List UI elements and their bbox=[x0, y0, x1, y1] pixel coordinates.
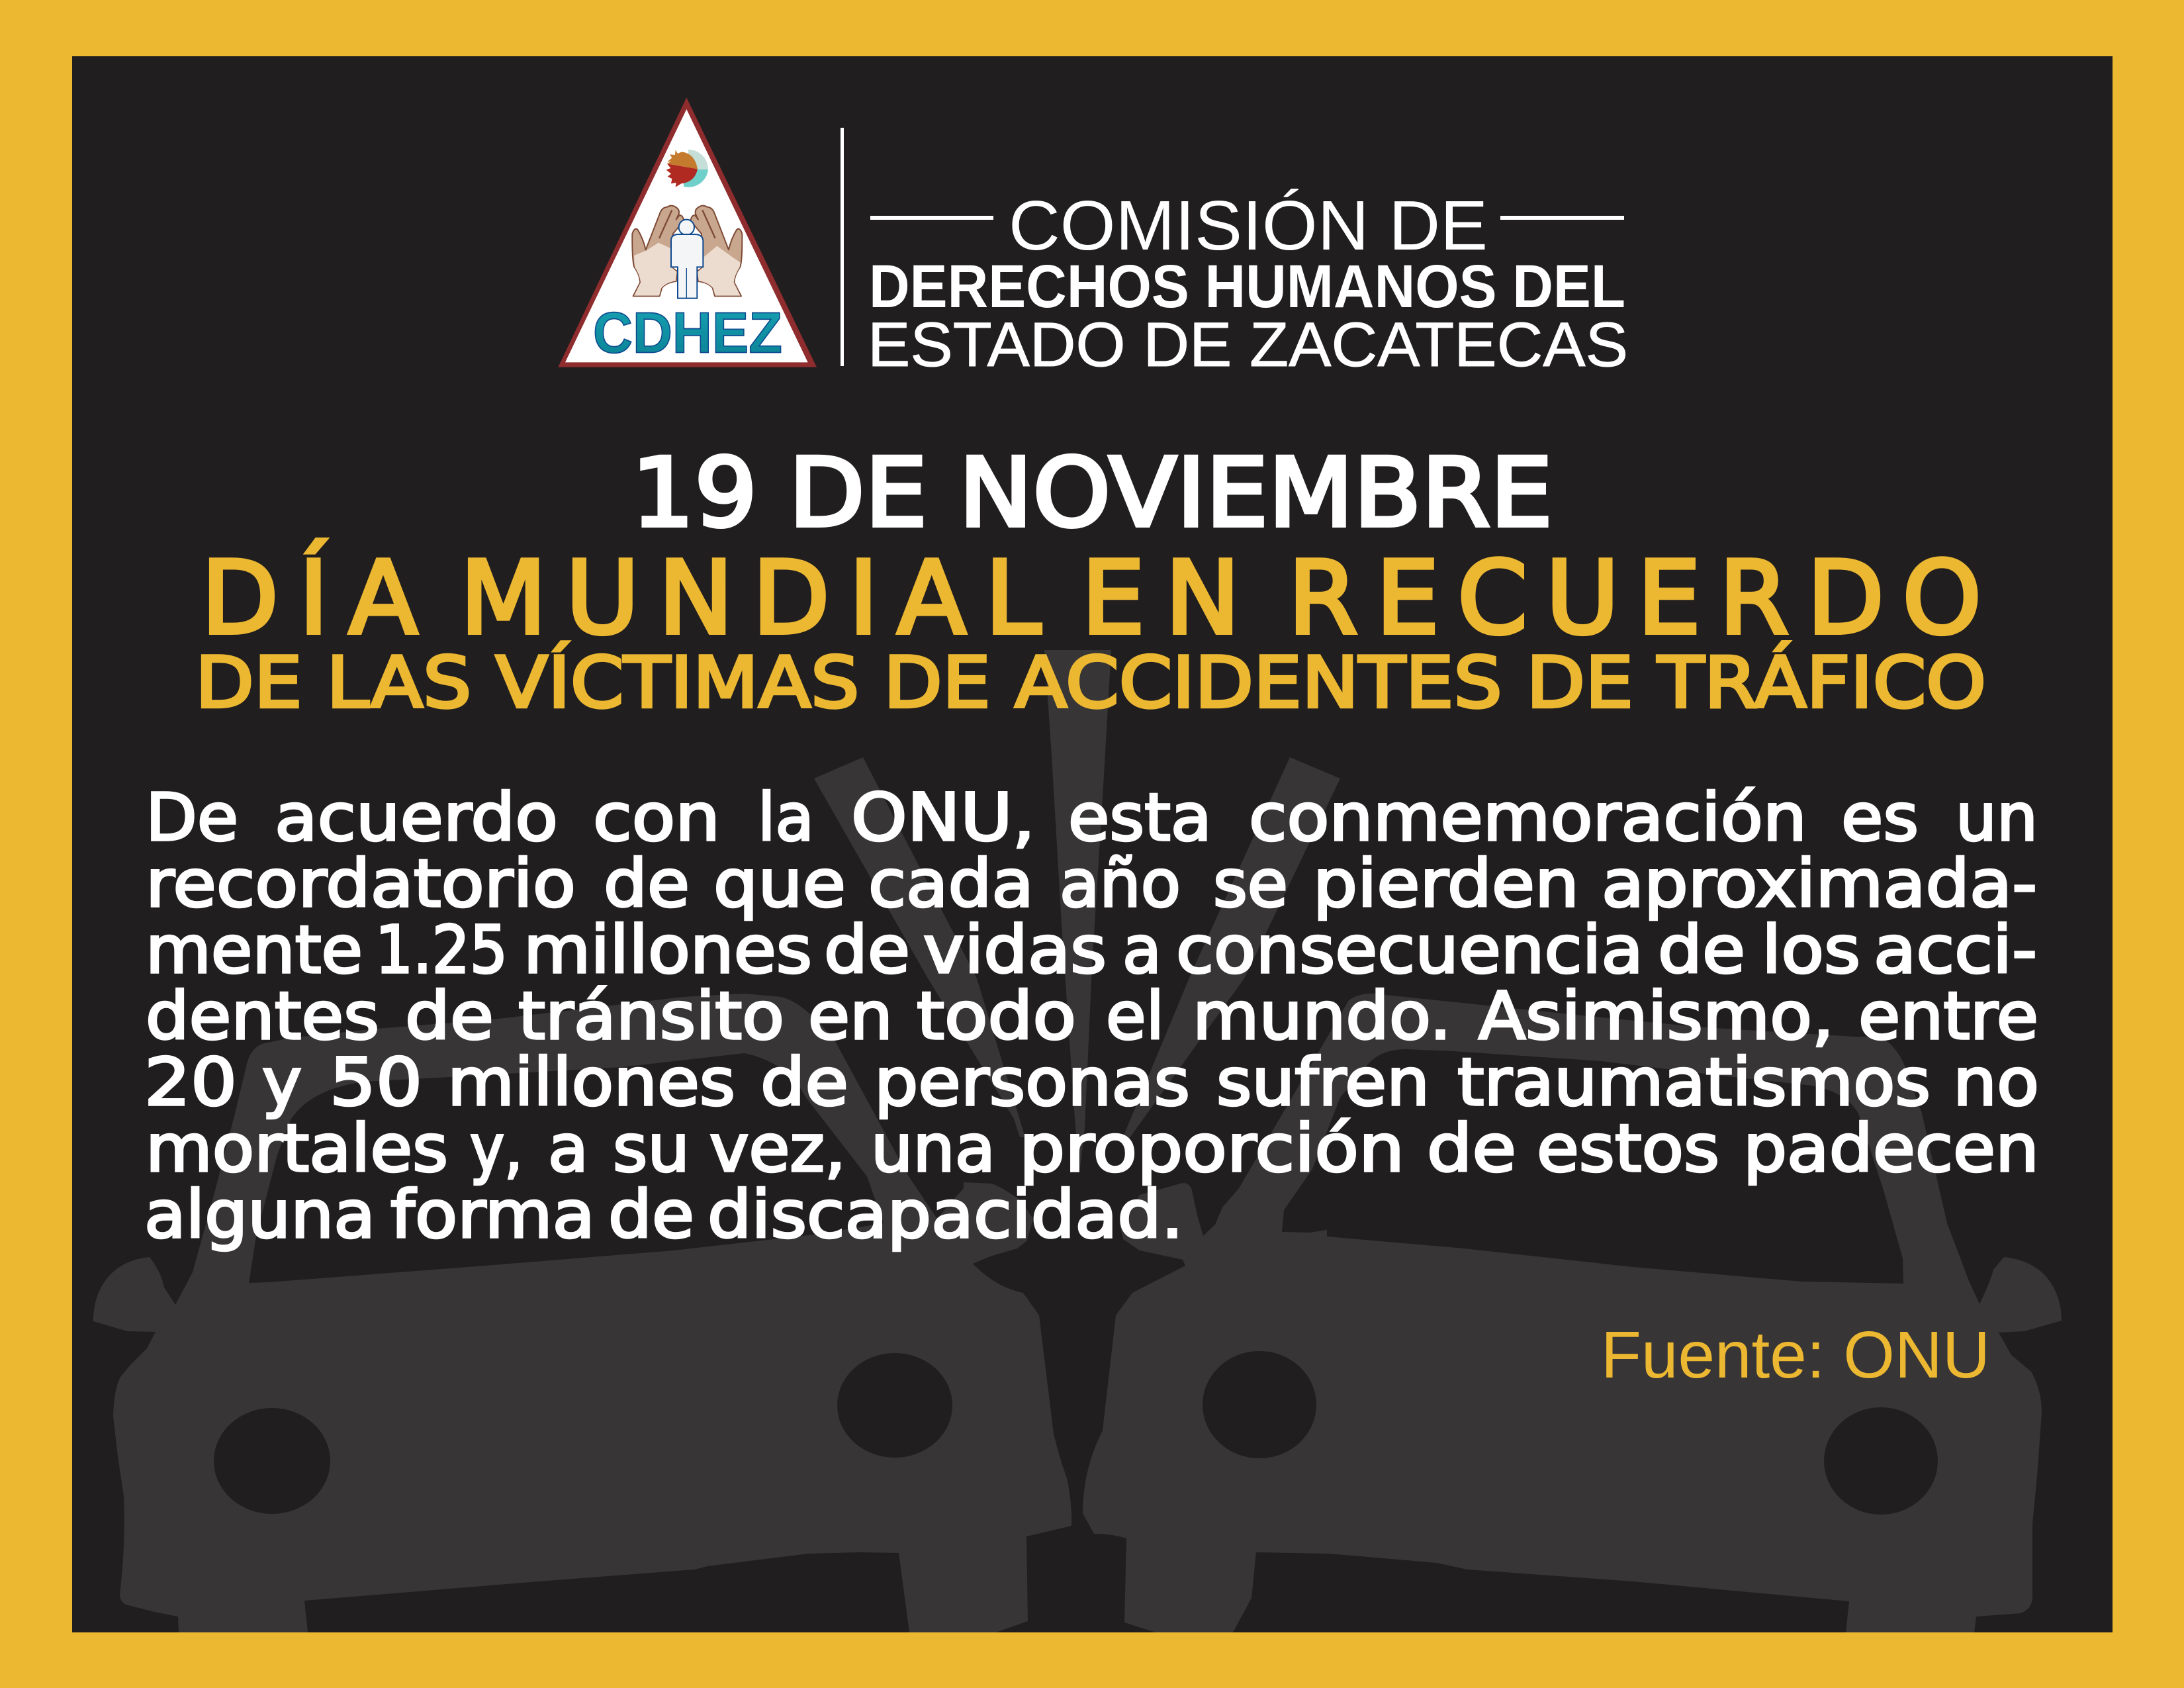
title line 1 bbox=[201, 539, 1981, 657]
left car headlight 2 bbox=[837, 1353, 952, 1458]
decorative rule left bbox=[870, 216, 993, 220]
body paragraph: forma bbox=[390, 1177, 595, 1253]
body paragraph: de bbox=[1427, 1111, 1516, 1187]
source note: Fuente: ONU bbox=[1601, 1318, 1990, 1392]
date heading: 19 DE NOVIEMBRE bbox=[631, 438, 1553, 548]
body paragraph: mente bbox=[146, 912, 363, 988]
body paragraph: su bbox=[613, 1111, 690, 1187]
title line 2: DE LAS VÍCTIMAS DE ACCIDENTES DE TRÁFICO bbox=[195, 642, 1986, 724]
CDHEZ lettering: CDHEZ bbox=[593, 300, 782, 365]
body paragraph: esta bbox=[1068, 780, 1212, 856]
body paragraph: millones bbox=[523, 912, 812, 988]
body paragraph bbox=[144, 780, 2039, 1253]
impact ray: right bbox=[1122, 757, 1340, 1139]
body paragraph: aproximada- bbox=[1602, 846, 2037, 922]
body paragraph: vez, bbox=[709, 1111, 846, 1187]
icon: sun and moon bbox=[666, 150, 708, 187]
body paragraph: a bbox=[548, 1111, 588, 1187]
body paragraph: estos bbox=[1537, 1111, 1719, 1187]
body paragraph: discapacidad. bbox=[707, 1177, 1183, 1253]
impact ray: left bbox=[814, 757, 1025, 1137]
title line 1: RECUERDO bbox=[1288, 539, 1981, 657]
body paragraph: mortales bbox=[146, 1111, 448, 1187]
icon: right hand bbox=[690, 206, 742, 296]
body paragraph: alguna bbox=[144, 1177, 375, 1253]
body paragraph: los bbox=[1762, 912, 1860, 988]
body paragraph: traumatismos bbox=[1457, 1045, 1931, 1121]
body paragraph: dentes bbox=[146, 978, 379, 1055]
body paragraph: sufren bbox=[1216, 1045, 1430, 1121]
body paragraph: de bbox=[608, 1177, 694, 1253]
body paragraph: conmemoración bbox=[1249, 780, 1807, 856]
body paragraph: a bbox=[1122, 912, 1161, 988]
body paragraph: en bbox=[808, 978, 893, 1055]
body paragraph: es bbox=[1841, 780, 1919, 856]
body paragraph: y bbox=[262, 1045, 302, 1121]
body paragraph: se bbox=[1213, 846, 1288, 922]
body paragraph: personas bbox=[874, 1045, 1190, 1121]
organisation name line 3: ESTADO DE ZACATECAS bbox=[868, 310, 1628, 380]
logo separator bbox=[841, 128, 844, 366]
body paragraph: cada bbox=[868, 846, 1034, 922]
right car silhouette bbox=[1083, 994, 2062, 1632]
icon: left hand bbox=[632, 206, 684, 296]
body paragraph: entre bbox=[1858, 978, 2038, 1055]
body paragraph: de bbox=[760, 1045, 848, 1121]
body paragraph: 1.25 bbox=[375, 912, 508, 988]
body paragraph: y, bbox=[470, 1111, 523, 1187]
right car headlight 1 bbox=[1203, 1351, 1316, 1458]
body paragraph: pierden bbox=[1313, 846, 1579, 922]
CDHEZ logo bbox=[558, 97, 817, 367]
body paragraph: mundo. bbox=[1193, 978, 1451, 1055]
title line 1: DÍA bbox=[201, 539, 418, 657]
logo triangle bbox=[558, 97, 817, 367]
body paragraph: con bbox=[593, 780, 720, 856]
body paragraph: acci- bbox=[1874, 912, 2037, 988]
organisation name bbox=[868, 187, 1628, 380]
body paragraph: el bbox=[1106, 978, 1164, 1055]
body paragraph: 50 bbox=[330, 1045, 422, 1121]
body paragraph: tránsito bbox=[518, 978, 784, 1055]
right car headlight 2 bbox=[1824, 1407, 1938, 1515]
body paragraph: ONU, bbox=[851, 780, 1035, 856]
body paragraph: millones bbox=[447, 1045, 735, 1121]
impact ray: centre bbox=[1044, 650, 1111, 1174]
body paragraph: de bbox=[604, 846, 690, 922]
body paragraph: proporción bbox=[1019, 1111, 1404, 1187]
body paragraph: de bbox=[405, 978, 494, 1055]
body paragraph: De bbox=[146, 780, 238, 856]
body paragraph: consecuencia bbox=[1176, 912, 1643, 988]
organisation name line 2: DERECHOS HUMANOS DEL bbox=[869, 253, 1625, 320]
background illustration: crashed cars bbox=[93, 650, 2062, 1632]
icon: person bbox=[671, 220, 703, 299]
body paragraph: de bbox=[824, 912, 910, 988]
body paragraph: Asimismo, bbox=[1479, 978, 1834, 1055]
body paragraph: 20 bbox=[144, 1045, 237, 1121]
title line 1: EN bbox=[1081, 539, 1240, 657]
left car silhouette bbox=[93, 994, 1071, 1632]
decorative rule right bbox=[1500, 216, 1624, 220]
body paragraph: padecen bbox=[1743, 1111, 2039, 1187]
left car headlight 1 bbox=[214, 1408, 330, 1514]
body paragraph: un bbox=[1956, 780, 2038, 856]
body paragraph: no bbox=[1953, 1045, 2039, 1121]
body paragraph: recordatorio bbox=[146, 846, 576, 922]
body paragraph: una bbox=[871, 1111, 995, 1187]
title line 1: MUNDIAL bbox=[460, 539, 1041, 657]
body paragraph: que bbox=[713, 846, 846, 922]
body paragraph: todo bbox=[917, 978, 1076, 1055]
body paragraph: de bbox=[1658, 912, 1745, 988]
body paragraph: acuerdo bbox=[275, 780, 558, 856]
body paragraph: la bbox=[758, 780, 814, 856]
organisation name line 1: COMISIÓN DE bbox=[1009, 187, 1488, 265]
body paragraph: vidas bbox=[923, 912, 1107, 988]
body paragraph: año bbox=[1060, 846, 1181, 922]
